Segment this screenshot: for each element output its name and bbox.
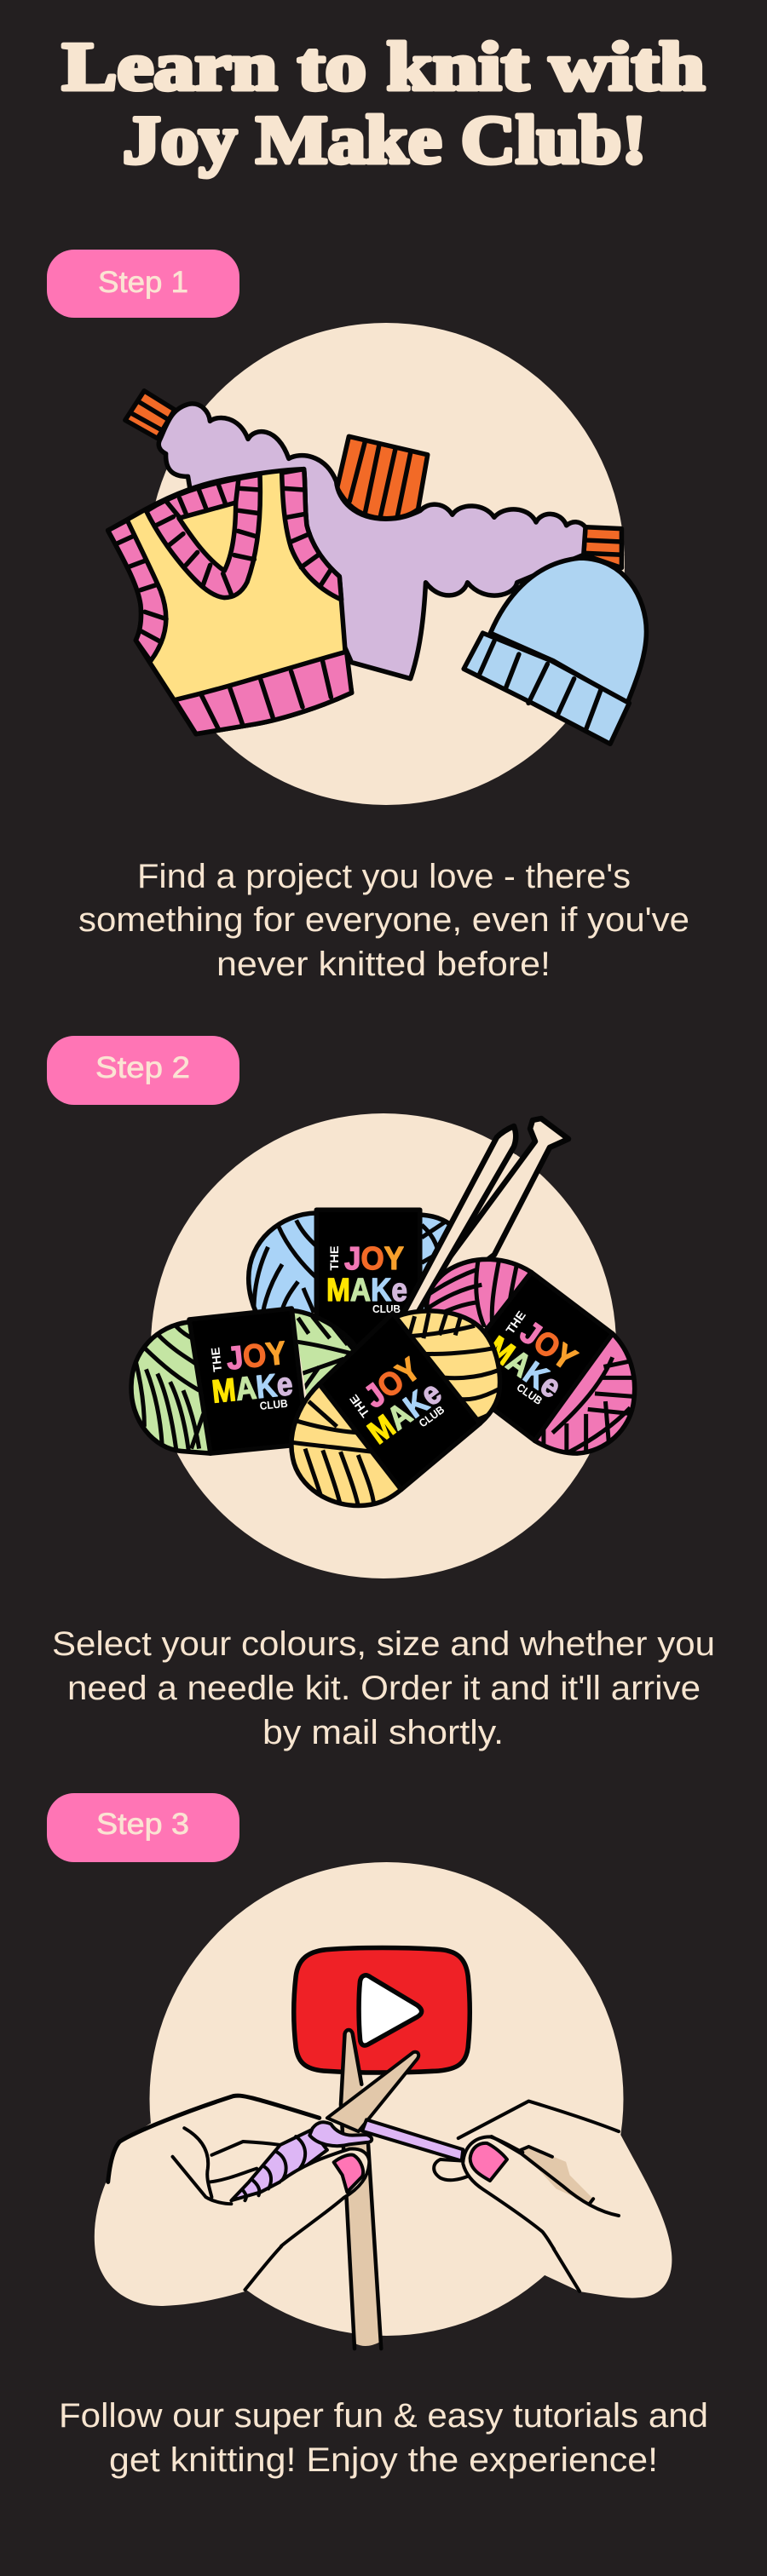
text: step 1 description: Find a project you love - there's	[137, 858, 631, 895]
title: Joy Make Club!	[123, 103, 647, 178]
text: step 3 description: Follow our super fun & easy tutorials and	[59, 2397, 708, 2435]
yellow yarn ball	[287, 1307, 503, 1509]
logo: green yarn label: JOY	[225, 1336, 288, 1377]
left thumb	[281, 2149, 369, 2246]
step 1 badge	[47, 250, 239, 318]
illustration: yarn balls and needles	[129, 1118, 637, 1509]
text: step 1 description: something for everyone, even if you've	[78, 901, 689, 939]
knitting needles	[400, 1118, 568, 1320]
blue yarn ball	[245, 1209, 478, 1351]
right finger outline	[463, 2136, 554, 2249]
logo: blue yarn label: CLUB	[372, 1302, 401, 1315]
illustration: hands knitting with play button	[95, 1948, 672, 2349]
left armhole trim	[108, 520, 166, 661]
yellow vest	[108, 469, 352, 734]
step 3 badge	[47, 1793, 239, 1862]
text: step 2 description: need a needle kit. Order it and it'll arrive	[67, 1670, 701, 1707]
hand outer lines	[458, 2102, 619, 2216]
sweater left cuff	[125, 391, 175, 439]
title: Learn to knit with	[62, 30, 705, 105]
logo: pink yarn label: JOY	[513, 1314, 583, 1377]
right hand needle end	[521, 2147, 593, 2204]
logo: yellow yarn label: JOY	[358, 1351, 427, 1415]
left hand outlines	[108, 2096, 320, 2204]
blue yarn label	[316, 1210, 420, 1351]
circle: step 2 background	[151, 1113, 616, 1578]
left thumb nail	[334, 2155, 363, 2192]
step 1 badge: Step 1	[98, 266, 188, 299]
neckline trim	[147, 474, 260, 598]
logo: pink yarn label	[476, 1304, 585, 1412]
step 3 badge: Step 3	[96, 1808, 189, 1841]
illustration: knitted garments	[108, 391, 646, 744]
right finger nail	[470, 2143, 507, 2181]
sweater right cuff	[584, 527, 621, 568]
pink yarn label	[450, 1272, 613, 1440]
left thumb outline	[281, 2149, 369, 2246]
blue beanie hat	[464, 558, 646, 744]
logo: blue yarn label: JOY	[344, 1241, 404, 1277]
lilac yarn strand	[362, 2119, 463, 2161]
text: step 3 description	[59, 2397, 708, 2479]
green yarn ball	[129, 1308, 360, 1455]
logo: green yarn label: CLUB	[259, 1397, 288, 1412]
title	[62, 30, 705, 178]
video play button	[294, 1948, 470, 2073]
logo: pink yarn label: MAKe	[481, 1330, 568, 1406]
logo: yellow yarn label: CLUB	[417, 1403, 447, 1429]
pink yarn ball	[424, 1253, 637, 1455]
sweater neck	[337, 436, 428, 519]
logo: blue yarn label: MAKe	[326, 1273, 407, 1308]
lilac sweater	[159, 404, 585, 679]
logo: pink yarn label: THE	[503, 1308, 528, 1337]
right armhole trim	[282, 469, 342, 600]
vertical knitting needle	[341, 2030, 381, 2349]
logo: blue yarn label	[326, 1241, 407, 1315]
step 2 badge: Step 2	[95, 1051, 190, 1084]
yarn loop on needle	[309, 2122, 372, 2146]
text: step 3 description: get knitting! Enjoy the experience!	[109, 2441, 658, 2479]
circle: step 1 background	[147, 323, 625, 805]
right thumb loop	[434, 2159, 467, 2180]
text: step 2 description: by mail shortly.	[262, 1714, 504, 1751]
logo: yellow yarn label	[343, 1349, 453, 1457]
logo: green yarn label	[207, 1335, 295, 1417]
text: step 1 description: never knitted before!	[216, 946, 551, 983]
hem ribbing	[175, 652, 352, 734]
logo: yellow yarn label: MAKe	[361, 1375, 448, 1452]
step 2 badge	[47, 1036, 239, 1105]
logo: blue yarn label: THE	[327, 1245, 341, 1271]
diagonal knitting needle	[327, 2052, 418, 2131]
logo: green yarn label: THE	[208, 1347, 224, 1372]
logo: yellow yarn label: THE	[347, 1392, 372, 1420]
green yarn label	[189, 1308, 308, 1453]
text: step 2 description: Select your colours, size and whether you	[52, 1625, 715, 1663]
text: step 2 description	[52, 1625, 715, 1751]
circle: step 3 background	[150, 1862, 624, 2336]
text: step 1 description	[78, 858, 689, 983]
fingers, nails and yarn strand	[281, 2119, 554, 2249]
logo: pink yarn label: CLUB	[514, 1381, 545, 1407]
lower hand lines	[245, 2246, 580, 2291]
logo: green yarn label: MAKe	[210, 1366, 295, 1411]
yarn wrapped around needle	[231, 2130, 327, 2200]
yellow yarn label	[320, 1314, 480, 1490]
hands silhouette	[95, 2084, 672, 2306]
